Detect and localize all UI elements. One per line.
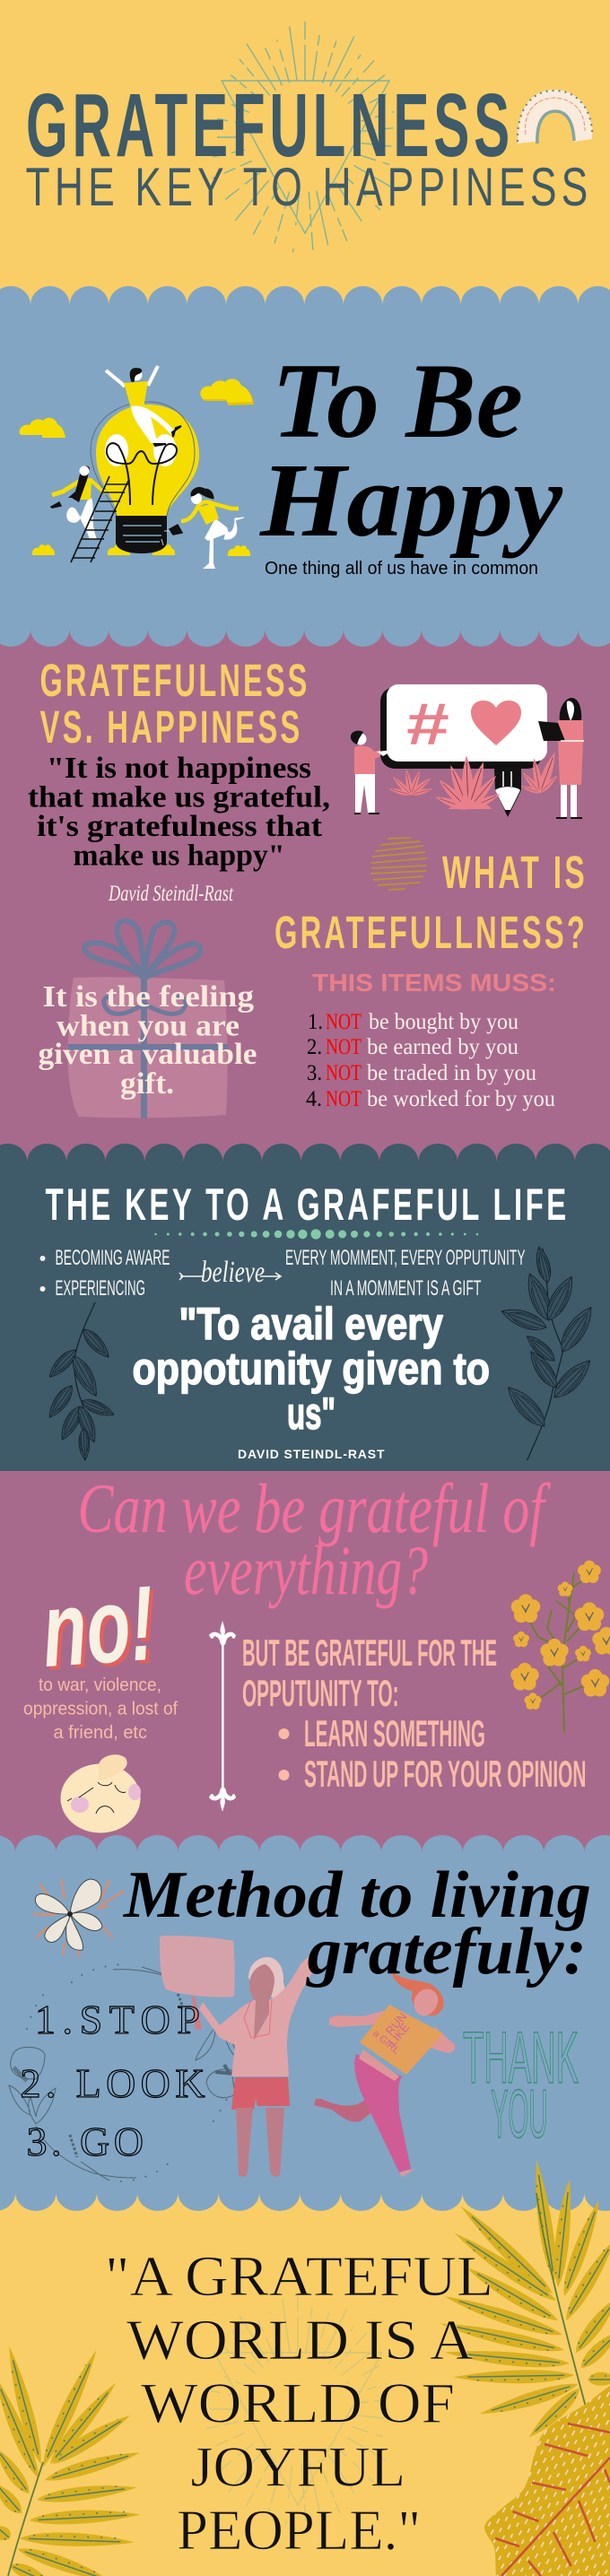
figure: woman with laptop <box>538 698 584 819</box>
quote <box>105 2244 493 2562</box>
text: definition: gift. <box>120 1067 174 1101</box>
figure: woman watering <box>170 487 244 569</box>
icon: gold sphere <box>370 838 427 890</box>
list of conditions: 4. <box>306 1087 322 1111</box>
heading <box>39 655 310 753</box>
figure: running girl <box>314 1972 455 2177</box>
quote: PEOPLE." <box>177 2498 421 2562</box>
dotted divider <box>154 1229 478 1240</box>
heading: happy: Happy <box>259 441 563 559</box>
believe arrow: believe <box>201 1256 265 1289</box>
text: but be grateful for <box>242 1632 587 1795</box>
heading: GRATEFULNESS <box>39 655 310 706</box>
quote: that make us grateful, <box>28 780 330 814</box>
icon: right leaf branch <box>499 1246 598 1460</box>
list of conditions: be bought by you <box>369 1010 518 1034</box>
figure: person on top <box>106 366 181 446</box>
list of conditions: 1. <box>308 1010 323 1034</box>
icon: clouds <box>20 379 254 556</box>
method steps: 3. GO <box>27 2119 144 2164</box>
text: things not to be grateful for: to war, violence, <box>39 1675 161 1695</box>
text: things not to be grateful for: oppression, a lost of <box>23 1699 178 1719</box>
panel: header <box>25 20 592 252</box>
list of conditions: NOT <box>326 1035 362 1059</box>
panel: method to living gratefully <box>9 1858 591 2181</box>
illustration: social board with people <box>351 684 584 819</box>
heading: what is gratefullness <box>274 847 588 958</box>
icon: big spotted leaf <box>484 2386 610 2576</box>
panel: gratefulness vs happiness <box>28 655 588 1118</box>
bullet list: BECOMING AWARE <box>56 1246 170 1270</box>
icon: pencil <box>494 769 521 817</box>
heading <box>77 1469 551 1609</box>
icon: floral wreath <box>9 1964 238 2181</box>
list of conditions: NOT <box>326 1087 362 1111</box>
icon: ladder <box>71 476 128 562</box>
list of conditions <box>306 1010 555 1111</box>
illustration: light bulb with people <box>20 366 254 569</box>
list of conditions: NOT <box>326 1061 362 1085</box>
figure: woman on ladder <box>51 466 107 538</box>
quote: us" <box>287 1388 336 1439</box>
method steps <box>20 1997 205 2164</box>
list of conditions: NOT <box>326 1010 362 1034</box>
text: things not to be grateful for: a friend, etc <box>54 1722 147 1743</box>
icon: sunburst triangle <box>213 20 400 252</box>
icon: sad face <box>61 1754 141 1833</box>
icon: left palm frond <box>0 2345 142 2576</box>
text: but be grateful for: OPPUTUNITY TO: <box>242 1672 398 1714</box>
icon: faint sunburst <box>205 2292 393 2524</box>
icon: board <box>380 687 542 769</box>
caption: One thing all of us have in common <box>265 558 538 579</box>
figure: running girl: LIKE <box>386 2020 413 2049</box>
vertical ornament <box>209 1621 236 1812</box>
quote: WORLD OF <box>141 2371 455 2434</box>
method steps: 2. LOOK <box>20 2060 205 2106</box>
panel: can we be grateful <box>23 1469 610 1833</box>
panel: to be happy <box>20 341 563 579</box>
figure: man pointing <box>351 731 394 814</box>
text: definition: given a valuable <box>38 1038 257 1071</box>
icon: yellow flowers <box>510 1561 610 1733</box>
list of conditions: 3. <box>307 1061 322 1085</box>
icon: left leaf branch <box>45 1302 116 1460</box>
quote: it's gratefulness that <box>37 810 323 843</box>
quote: "A GRATEFUL <box>105 2244 493 2308</box>
heading <box>123 1858 591 1989</box>
bullet list: EXPERIENCING <box>56 1276 145 1301</box>
quote attribution: David Steindl-Rast <box>108 882 234 906</box>
list of conditions: be earned by you <box>367 1035 518 1059</box>
figure: running girl: RUN <box>383 2010 409 2038</box>
icon: right palm frond <box>438 2159 610 2442</box>
text: definition <box>38 980 257 1101</box>
panel: closing quote <box>0 2159 610 2576</box>
text: things not to be grateful for <box>23 1675 178 1743</box>
figure: running girl: a GIRL <box>370 2028 401 2057</box>
heading: to be: To Be <box>272 341 523 460</box>
no exclamation <box>39 1564 161 1693</box>
quote: oppotunity given to <box>133 1344 490 1394</box>
icon: gift box <box>68 921 228 1118</box>
list of conditions: 2. <box>307 1035 322 1059</box>
quote <box>28 752 330 872</box>
no exclamation: no! <box>39 1564 158 1690</box>
right caption: IN A MOMMENT IS A GIFT <box>330 1276 482 1301</box>
right caption <box>285 1246 526 1301</box>
bullet list <box>39 1246 170 1301</box>
quote: make us happy" <box>74 840 285 872</box>
icon: white flower <box>33 1879 125 1957</box>
icon: bulb <box>91 402 199 553</box>
quote <box>133 1299 490 1439</box>
figure: person with sign <box>160 1936 316 2177</box>
list of conditions: be worked for by you <box>367 1087 555 1111</box>
heading: Method to living <box>123 1858 591 1932</box>
heading: gratefuly: <box>305 1915 587 1989</box>
thank you lettering <box>463 2017 580 2154</box>
icon: rainbow <box>518 90 592 144</box>
heading: everything? <box>184 1531 428 1609</box>
icon: heart <box>471 701 521 745</box>
subheading: THIS ITEMS MUSS: <box>312 969 556 996</box>
icon: plants <box>388 751 560 813</box>
quote: "To avail every <box>179 1299 443 1349</box>
attribution: DAVID STEINDL-RAST <box>238 1447 385 1461</box>
text: definition: It is the feeling <box>43 980 254 1014</box>
quote: WORLD IS A <box>126 2308 474 2371</box>
list of conditions: be traded in by you <box>367 1061 536 1085</box>
method steps: 1.STOP <box>35 1997 200 2042</box>
icon: hashtag: # <box>406 691 449 757</box>
quote: "It is not happiness <box>47 752 311 785</box>
heading: VS. HAPPINESS <box>39 701 303 753</box>
quote: JOYFUL <box>190 2434 405 2499</box>
text: definition: when you are <box>57 1010 240 1042</box>
no exclamation: no! <box>42 1567 161 1693</box>
panel: key to a grateful life <box>39 1179 598 1461</box>
